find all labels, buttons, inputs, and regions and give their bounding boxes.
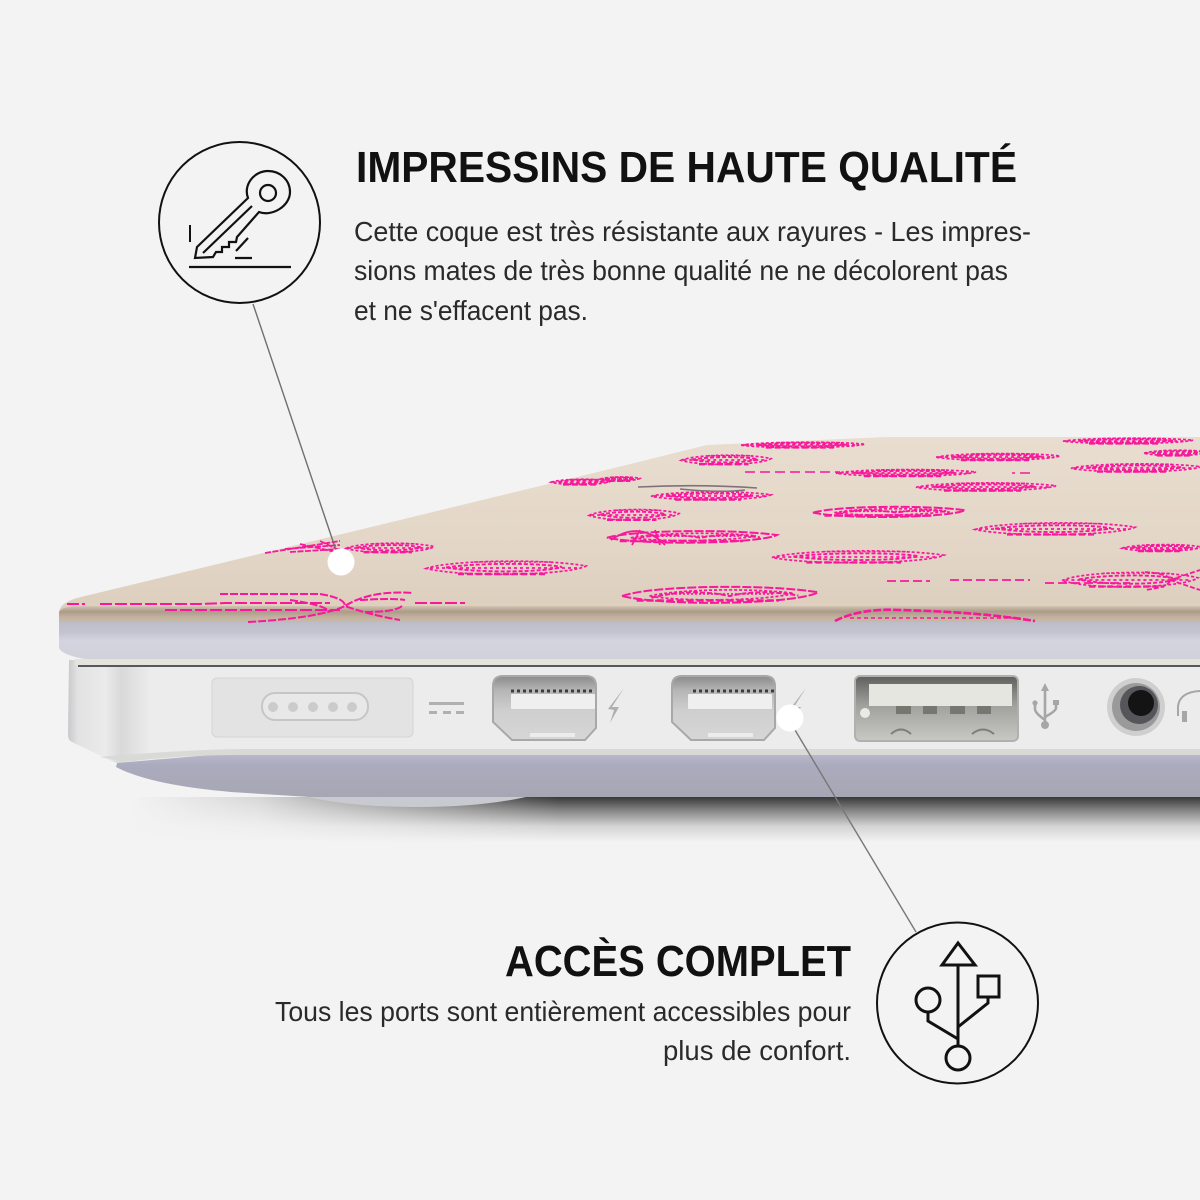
icon: usb in circle [877,922,1038,1084]
icon: thunderbolt 1 [608,688,624,723]
rubber foot [308,797,526,807]
heading: print quality: IMPRESSINS DE HAUTE QUALITÉ [356,142,1017,192]
left corner highlight [68,660,150,763]
port: usb [855,676,1018,741]
lilac case bumper [59,618,1200,659]
connector dot: print [328,548,354,576]
laptop with case [59,437,1200,842]
icon: headphones [1178,691,1200,722]
text block: print quality: sions mates de très bonne qualité ne ne décolorent pas [354,255,1008,286]
port: headphone jack [1107,678,1165,736]
icon: usb [1032,683,1059,729]
icon: dc power [429,702,464,714]
aluminium port side [68,660,1200,763]
logo reflection [638,486,757,491]
text block: print quality [354,216,1031,326]
port: thunderbolt 2 [672,676,775,740]
lid edge band [59,606,1200,622]
text block: print quality: et ne s'effacent pas. [354,295,588,326]
lower edge highlight [100,749,1200,762]
table shadow [130,797,1200,842]
laptop lower lilac shell [116,752,1200,797]
hinge line [75,659,1200,667]
icon: thunderbolt 2 [790,688,806,723]
heading: full access: ACCÈS COMPLET [505,936,851,986]
port: thunderbolt 1 [493,676,596,740]
connector line: ports [795,730,916,932]
icon: key in circle [159,142,320,303]
port: magsafe [212,678,413,737]
text block: full access: Tous les ports sont entièrement accessibles pour [275,996,851,1027]
text block: full access [275,996,851,1066]
connector line: print [253,304,340,562]
printed shell pattern [67,438,1200,622]
text block: print quality: Cette coque est très résistante aux rayures - Les impres- [354,216,1031,247]
connector dot: ports [776,704,804,732]
lid top surface [59,437,1200,622]
text block: full access: plus de confort. [663,1035,851,1066]
